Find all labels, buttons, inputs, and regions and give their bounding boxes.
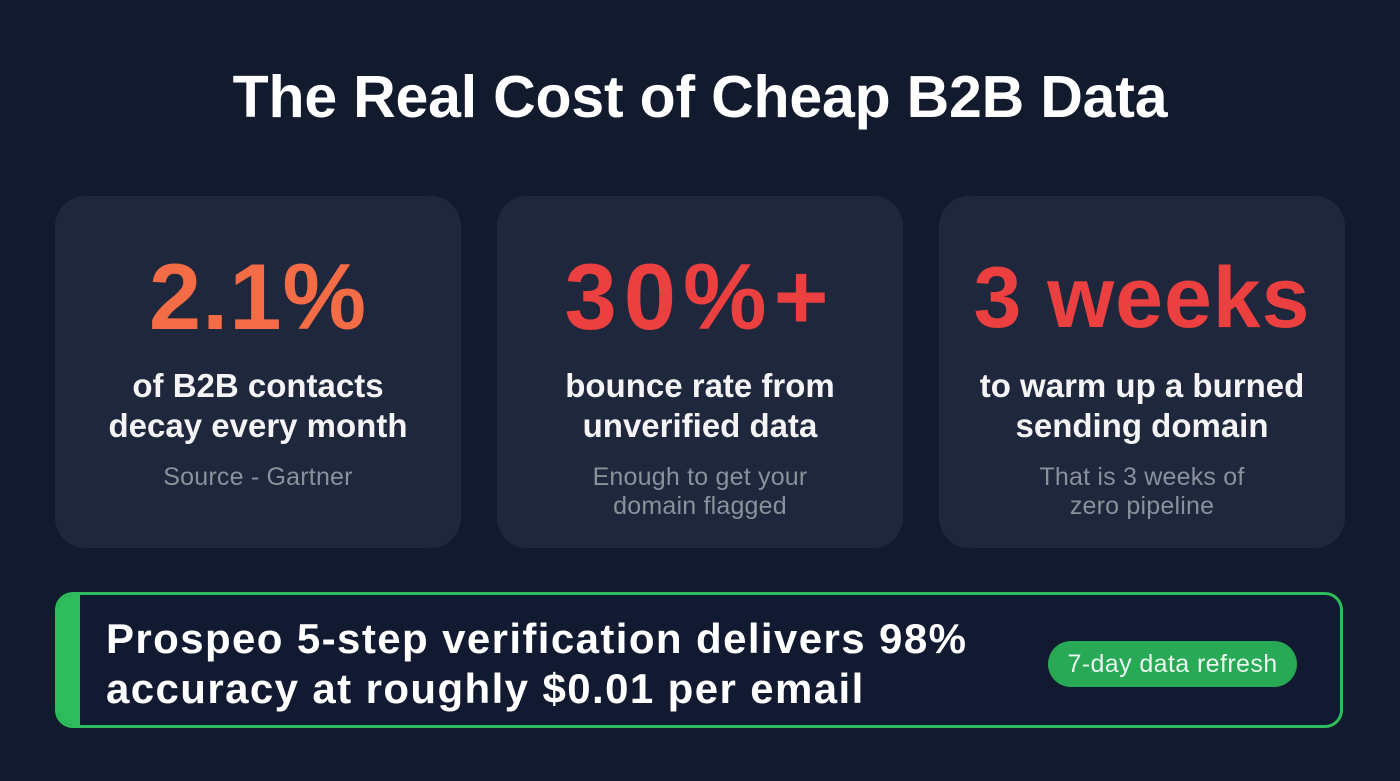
stat: 3 weeks: 3 weeks: [974, 250, 1310, 346]
text: warm up: [980, 367, 1304, 444]
note: zero pipeline: That is 3 weeks of: [1039, 463, 1245, 491]
note: flagged: [593, 463, 807, 520]
text: decay: [109, 367, 407, 444]
banner text: [106, 615, 967, 712]
text: bounce: bounce rate from: [565, 367, 835, 404]
text: warm up: to warm up a burned: [980, 367, 1304, 404]
note: zero pipeline: [1039, 463, 1245, 520]
stat: 30%+: 30%+: [564, 244, 836, 349]
note: flagged: domain flagged: [613, 492, 787, 520]
panel: warm up: [939, 196, 1345, 548]
text: decay: of B2B contacts: [132, 367, 384, 404]
banner text: accuracy at roughly $0.01 per email: [106, 665, 865, 712]
note: flagged: Enough to get your: [593, 463, 807, 491]
panel: bounce: [497, 196, 903, 548]
text: decay: decay every month: [109, 407, 407, 444]
note: source: Source - Gartner: [163, 463, 353, 491]
note: zero pipeline: zero pipeline: [1070, 492, 1214, 520]
panel: decay: [55, 196, 461, 548]
pill: refresh: [1048, 641, 1297, 687]
callout banner: [55, 592, 1343, 728]
title: The Real Cost of Cheap B2B Data: [233, 64, 1167, 130]
text: bounce: [565, 367, 835, 444]
text: bounce: unverified data: [583, 407, 817, 444]
pill: refresh: 7-day data refresh: [1067, 650, 1278, 678]
banner text: Prospeo 5-step verification delivers 98%: [106, 615, 967, 662]
text: warm up: sending domain: [1015, 407, 1268, 444]
stat: 2.1%: 2.1%: [149, 244, 367, 349]
